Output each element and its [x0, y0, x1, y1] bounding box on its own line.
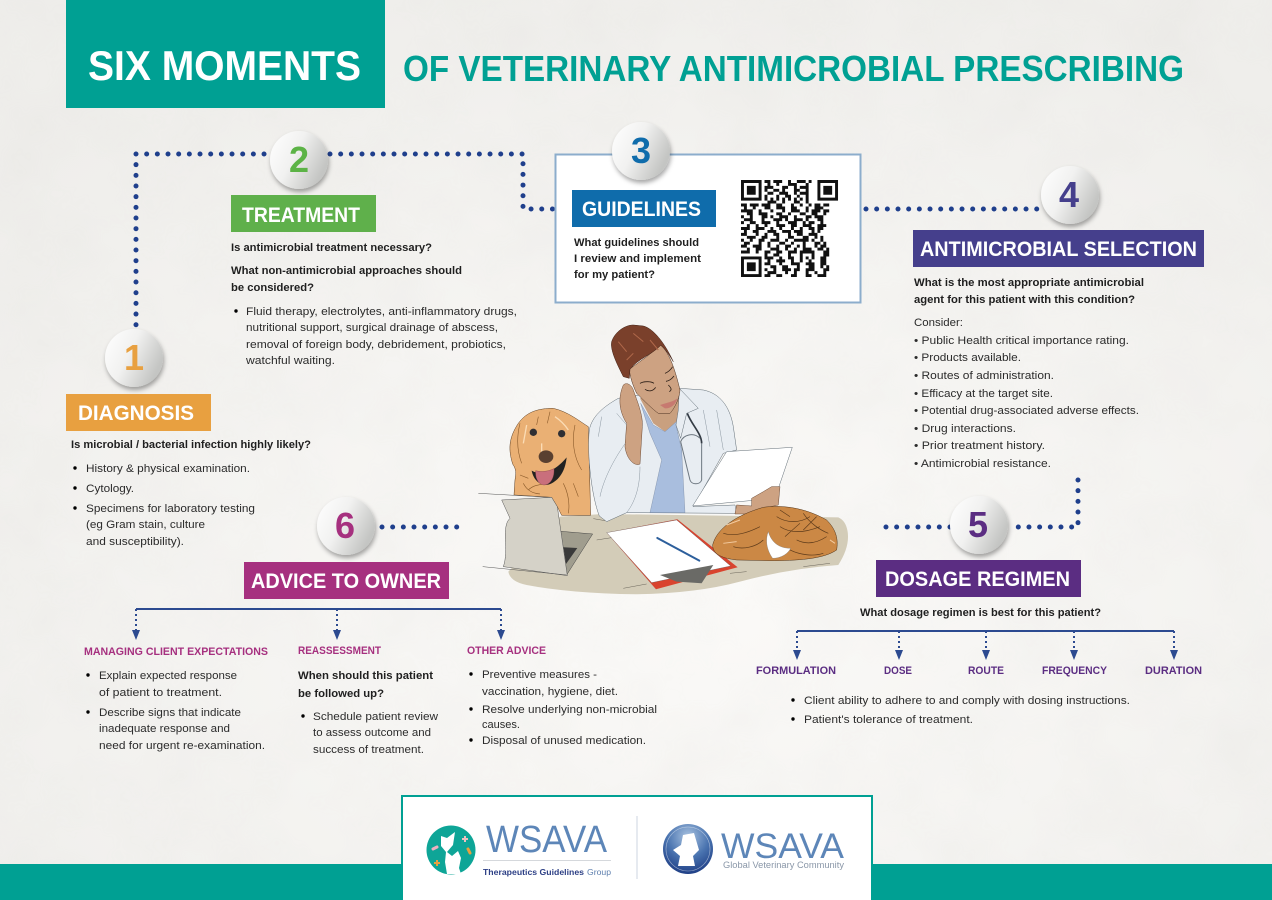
dosage labels: DOSE: [884, 665, 912, 677]
text: guidelines: for my patient?: [574, 269, 655, 281]
heading: advice to owner: ADVICE TO OWNER: [251, 570, 441, 593]
text: antimicrobial selection: [914, 277, 1144, 470]
text: dosage notes: Client ability to adhere to and comply with dosing instructions.: [804, 695, 1130, 707]
diagram: advice branches: [132, 609, 505, 640]
logo: therapeutics guidelines group: Therapeutics Guidelines: [483, 867, 584, 877]
dosage labels: DURATION: [1145, 665, 1202, 677]
text: diagnosis: (eg Gram stain, culture: [86, 519, 205, 531]
dotted connector: diagnosis to treatment: [136, 154, 272, 328]
text: antimicrobial selection: agent for this patient with this condition?: [914, 294, 1135, 306]
text: antimicrobial selection: • Prior treatment history.: [914, 440, 1045, 452]
text: reassessment: REASSESSMENT: [298, 645, 381, 657]
text: antimicrobial selection: • Public Health critical importance rating.: [914, 335, 1129, 347]
text: antimicrobial selection: • Potential drug-associated adverse effects.: [914, 405, 1139, 417]
text: managing client expectations: of patient to treatment.: [99, 687, 222, 699]
clipboard: [607, 519, 738, 589]
text: treatment: watchful waiting.: [245, 355, 335, 367]
heading: antimicrobial selection: [913, 230, 1204, 267]
subtitle: OF VETERINARY ANTIMICROBIAL PRESCRIBING: [403, 48, 1184, 89]
text: diagnosis: Specimens for laboratory testing: [86, 503, 255, 515]
step 3 badge: [612, 122, 670, 180]
step 4 badge: [1041, 166, 1099, 224]
dotted connector: treatment to guidelines: [330, 154, 556, 209]
QR code: [741, 180, 838, 277]
stethoscope: [687, 413, 702, 443]
step 6 badge: 6: [335, 505, 355, 546]
text: guidelines: I review and implement: [574, 253, 701, 265]
step 3 badge: 3: [631, 130, 651, 171]
text: other advice: causes.: [482, 719, 520, 731]
neck: [640, 388, 679, 432]
heading: dosage regimen: [876, 560, 1081, 597]
text: diagnosis: [71, 439, 311, 548]
heading: treatment: [231, 195, 376, 232]
table shadow strokes: [593, 519, 830, 588]
logo: therapeutics guidelines group: [426, 819, 611, 877]
text: reassessment: to assess outcome and: [313, 727, 431, 739]
text: diagnosis: History & physical examination.: [86, 463, 250, 475]
table: [508, 514, 848, 594]
text: guidelines: What guidelines should: [574, 237, 699, 249]
text: managing client expectations: MANAGING CLIENT EXPECTATIONS: [84, 646, 268, 658]
title banner: SIX MOMENTS: [88, 42, 361, 89]
text: antimicrobial selection: • Efficacy at the target site.: [914, 388, 1053, 400]
step 6 badge: [317, 497, 375, 555]
text: antimicrobial selection: • Routes of administration.: [914, 370, 1054, 382]
logo: wsava global veterinary community: Global Veterinary Community: [723, 860, 845, 870]
text: reassessment: [298, 645, 439, 756]
face: [629, 345, 680, 413]
text: reassessment: When should this patient: [298, 670, 433, 682]
text: dosage notes: Patient's tolerance of treatment.: [804, 714, 973, 726]
text: antimicrobial selection: Consider:: [914, 317, 963, 329]
text: dosage question: What dosage regimen is best for this patient?: [860, 607, 1101, 619]
text: other advice: Preventive measures -: [482, 669, 597, 681]
text: diagnosis: Cytology.: [86, 483, 134, 495]
text: other advice: [467, 645, 657, 747]
diagram: dosage branches: [793, 631, 1178, 660]
forearm and hand holding paper: [735, 487, 780, 514]
text: reassessment: be followed up?: [298, 688, 384, 700]
dog: [510, 408, 591, 515]
hand at ear: [620, 384, 642, 465]
dosage labels: ROUTE: [968, 665, 1004, 677]
step 1 badge: [105, 329, 163, 387]
text: other advice: vaccination, hygiene, diet.: [482, 686, 618, 698]
step 5 badge: [950, 496, 1008, 554]
text: treatment: Is antimicrobial treatment necessary?: [231, 242, 432, 254]
text: reassessment: success of treatment.: [313, 744, 424, 756]
step 5 badge: 5: [968, 504, 988, 545]
heading: advice to owner: [244, 562, 449, 599]
step 2 badge: [270, 131, 328, 189]
lab coat: [589, 388, 737, 522]
text: antimicrobial selection: • Drug interactions.: [914, 423, 1016, 435]
step 4 badge: 4: [1059, 174, 1079, 215]
text: antimicrobial selection: • Antimicrobial resistance.: [914, 458, 1051, 470]
heading: diagnosis: [66, 394, 211, 431]
coat collar: [676, 388, 698, 438]
text: diagnosis: and susceptibility).: [86, 536, 184, 548]
heading: antimicrobial selection: ANTIMICROBIAL SELECTION: [920, 238, 1197, 261]
text: other advice: OTHER ADVICE: [467, 645, 546, 657]
dotted connector: advice: [382, 524, 458, 530]
step 1 badge: 1: [124, 337, 144, 378]
text: managing client expectations: inadequate response and: [99, 723, 230, 735]
text: treatment: nutritional support, surgical drainage of abscess,: [246, 322, 498, 334]
heading: treatment: TREATMENT: [242, 204, 360, 227]
text: reassessment: Schedule patient review: [313, 711, 439, 723]
illustration: vet with dog and cat: [478, 325, 848, 594]
laptop: [478, 493, 593, 576]
facial features: [640, 367, 674, 392]
title banner: [66, 0, 385, 108]
text: treatment: [231, 242, 517, 367]
heading: guidelines: [572, 190, 716, 227]
dotted connector: guidelines to antimicrobial selection: [866, 206, 1042, 212]
logo: therapeutics guidelines group: WSAVA: [486, 819, 608, 861]
text: treatment: Fluid therapy, electrolytes, anti-inflammatory drugs,: [246, 306, 517, 318]
dotted connector: antimicrobial selection to dosage: [1010, 480, 1078, 527]
text: managing client expectations: Describe signs that indicate: [99, 707, 241, 719]
heading: guidelines: GUIDELINES: [582, 198, 701, 221]
dosage labels: FORMULATION: [756, 665, 836, 677]
dosage labels: [756, 665, 1202, 677]
dosage labels: FREQUENCY: [1042, 665, 1108, 677]
logo: wsava global veterinary community: [663, 824, 845, 874]
text: managing client expectations: [84, 646, 268, 752]
step 2 badge: 2: [289, 139, 309, 180]
footer logo panel: [402, 796, 872, 900]
logo: therapeutics guidelines group: Group: [587, 867, 611, 877]
dotted connector: dosage to advice, right part: [880, 524, 950, 530]
shirt: [641, 403, 685, 513]
text: antimicrobial selection: What is the most appropriate antimicrobial: [914, 277, 1144, 289]
hair: [611, 325, 673, 378]
text: dosage notes: [791, 695, 1130, 726]
cat: [713, 506, 837, 561]
text: treatment: removal of foreign body, debridement, probiotics,: [246, 339, 506, 351]
paper: [693, 447, 792, 506]
text: managing client expectations: Explain expected response: [99, 670, 237, 682]
coat folds: [598, 410, 723, 513]
text: treatment: be considered?: [231, 282, 314, 294]
panel: guidelines box: [556, 154, 860, 302]
text: other advice: Disposal of unused medication.: [482, 735, 646, 747]
text: managing client expectations: need for urgent re-examination.: [99, 740, 265, 752]
heading: dosage regimen: DOSAGE REGIMEN: [885, 568, 1070, 591]
footer band: [0, 864, 1272, 900]
text: treatment: What non-antimicrobial approaches should: [231, 265, 462, 277]
text: diagnosis: Is microbial / bacterial infection highly likely?: [71, 439, 311, 451]
logo: wsava global veterinary community: WSAVA: [721, 827, 845, 866]
heading: diagnosis: DIAGNOSIS: [78, 402, 194, 425]
text: guidelines: [574, 237, 701, 281]
text: other advice: Resolve underlying non-microbial: [482, 704, 657, 716]
text: antimicrobial selection: • Products available.: [914, 352, 1021, 364]
